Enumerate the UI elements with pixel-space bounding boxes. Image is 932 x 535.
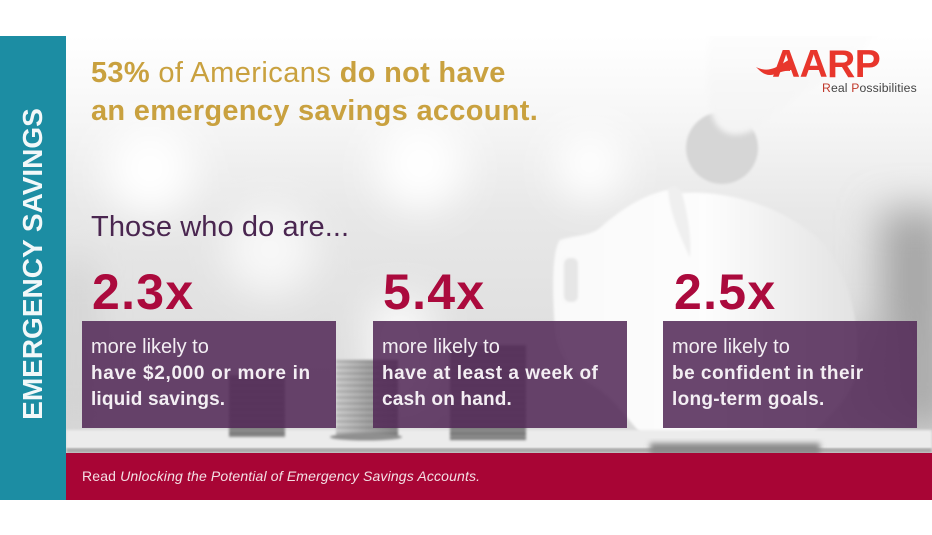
stat 2 panel: more likely to [382,336,500,358]
stat 3 panel: long-term goals. [672,389,825,410]
background photo: piggy bank and coins [66,90,932,453]
headline: an emergency savings account. [91,95,538,127]
logo tagline: Real Possibilities [822,81,917,95]
stat 1 panel: more likely to [91,336,209,358]
stat 3 number: 2.5x [674,264,777,320]
sidebar title: EMERGENCY SAVINGS [17,108,48,420]
stat 3 panel: be confident in their [672,363,864,384]
finger [707,20,890,135]
subheading: Those who do are... [91,211,349,243]
stat 2 number: 5.4x [383,264,486,320]
stat 1 number: 2.3x [92,264,195,320]
piggy bank [553,186,857,442]
stat 3 panel: more likely to [672,336,790,358]
stat 1 panel: have $2,000 or more in [91,363,311,384]
stat 2 panel: have at least a week of [382,363,598,384]
coin [686,112,758,184]
stat 3 panel [663,321,917,428]
footer bar [66,453,932,500]
logo swoosh [756,60,790,75]
stat 1 panel [82,321,336,428]
logo: AARP [756,43,917,95]
headline: 53% of Americans do not have [91,57,506,89]
stat 2 panel: cash on hand. [382,389,512,410]
footer link text: Read Unlocking the Potential of Emergency Savings Accounts. [82,468,480,484]
table surface [66,430,932,453]
stat 1 panel: liquid savings. [91,389,225,410]
headline [91,57,538,127]
logo wordmark: AARP [772,43,880,86]
sidebar: teal band [0,36,66,500]
stat 2 panel [373,321,627,428]
coin stacks [229,345,526,440]
